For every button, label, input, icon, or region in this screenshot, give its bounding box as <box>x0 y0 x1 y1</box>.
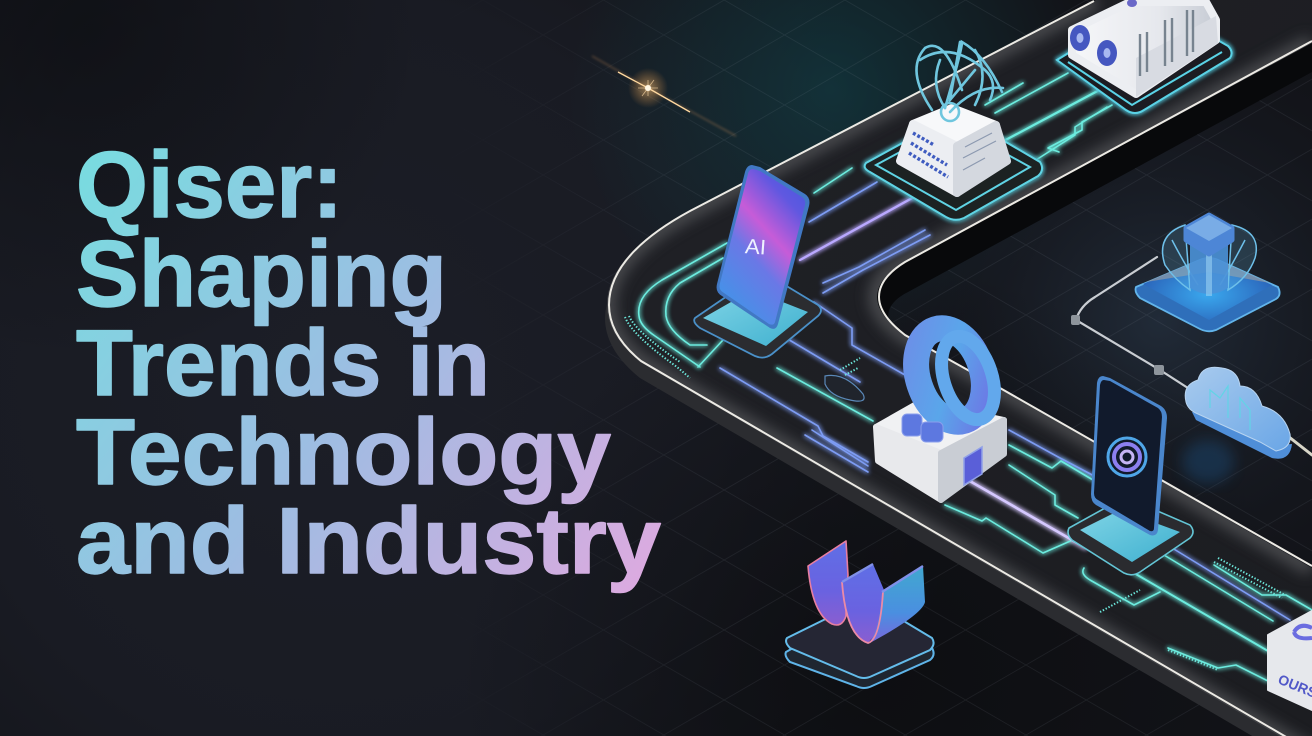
title: Technology <box>76 399 611 504</box>
cloud reflection glow <box>1182 440 1234 484</box>
title: Qiser: <box>76 132 343 237</box>
beam trace <box>968 480 1086 548</box>
dotted traces <box>625 316 1285 670</box>
icon: cloud <box>1185 367 1292 459</box>
cable connectors <box>1071 315 1164 375</box>
machine ribs <box>1140 10 1193 76</box>
column cap <box>1186 215 1232 254</box>
icon: U shape on tray <box>786 541 934 688</box>
platform road <box>605 0 1312 736</box>
icon: server cube tray <box>865 116 1042 220</box>
title: Shaping <box>76 221 447 326</box>
icon: blue holographic device <box>1136 215 1280 331</box>
port <box>964 447 982 485</box>
machine lenses <box>1070 25 1117 66</box>
cable <box>1071 257 1312 455</box>
small blue blocks <box>902 414 943 442</box>
circuit traces <box>639 73 1312 681</box>
blue ring <box>905 319 995 431</box>
cube printed text <box>909 133 948 177</box>
icon: big machine tray <box>1057 30 1232 113</box>
phone screen <box>720 169 805 325</box>
tray upper <box>786 601 934 678</box>
icon: tray under second phone <box>1068 497 1193 575</box>
icon: AI smartphone <box>717 165 810 329</box>
teal traces around corner <box>639 73 1312 681</box>
title: and Industry <box>76 488 661 593</box>
icon: OURS cube <box>1268 611 1312 710</box>
U left <box>808 541 848 625</box>
icon: tray under AI phone <box>694 274 821 358</box>
column <box>1190 240 1228 294</box>
road side wall <box>605 0 1312 736</box>
icon: second smartphone <box>1091 376 1167 535</box>
phone screen <box>1094 380 1162 531</box>
title: Trends in <box>76 310 490 415</box>
tray lower <box>786 608 934 688</box>
road white edge lines <box>609 1 1312 736</box>
holographic wings <box>1162 225 1256 290</box>
icon: wire sphere sculpture <box>916 42 1003 121</box>
light flare <box>592 56 736 136</box>
icon: big white machine <box>1070 0 1218 97</box>
icon: white server cube with text <box>900 108 1007 193</box>
icon: small mouse puck <box>825 375 864 401</box>
title <box>76 132 661 593</box>
phone AI label: AI <box>744 235 767 260</box>
screen rings <box>1108 438 1146 476</box>
periwinkle traces <box>720 182 1290 620</box>
road surface <box>607 0 1312 736</box>
road edge sheen <box>607 0 1312 736</box>
white cube <box>876 402 1004 500</box>
icon: ring on white cube <box>876 319 1004 500</box>
purple white trace <box>800 197 914 260</box>
U right <box>868 566 925 644</box>
inner wall dark <box>877 43 1312 326</box>
